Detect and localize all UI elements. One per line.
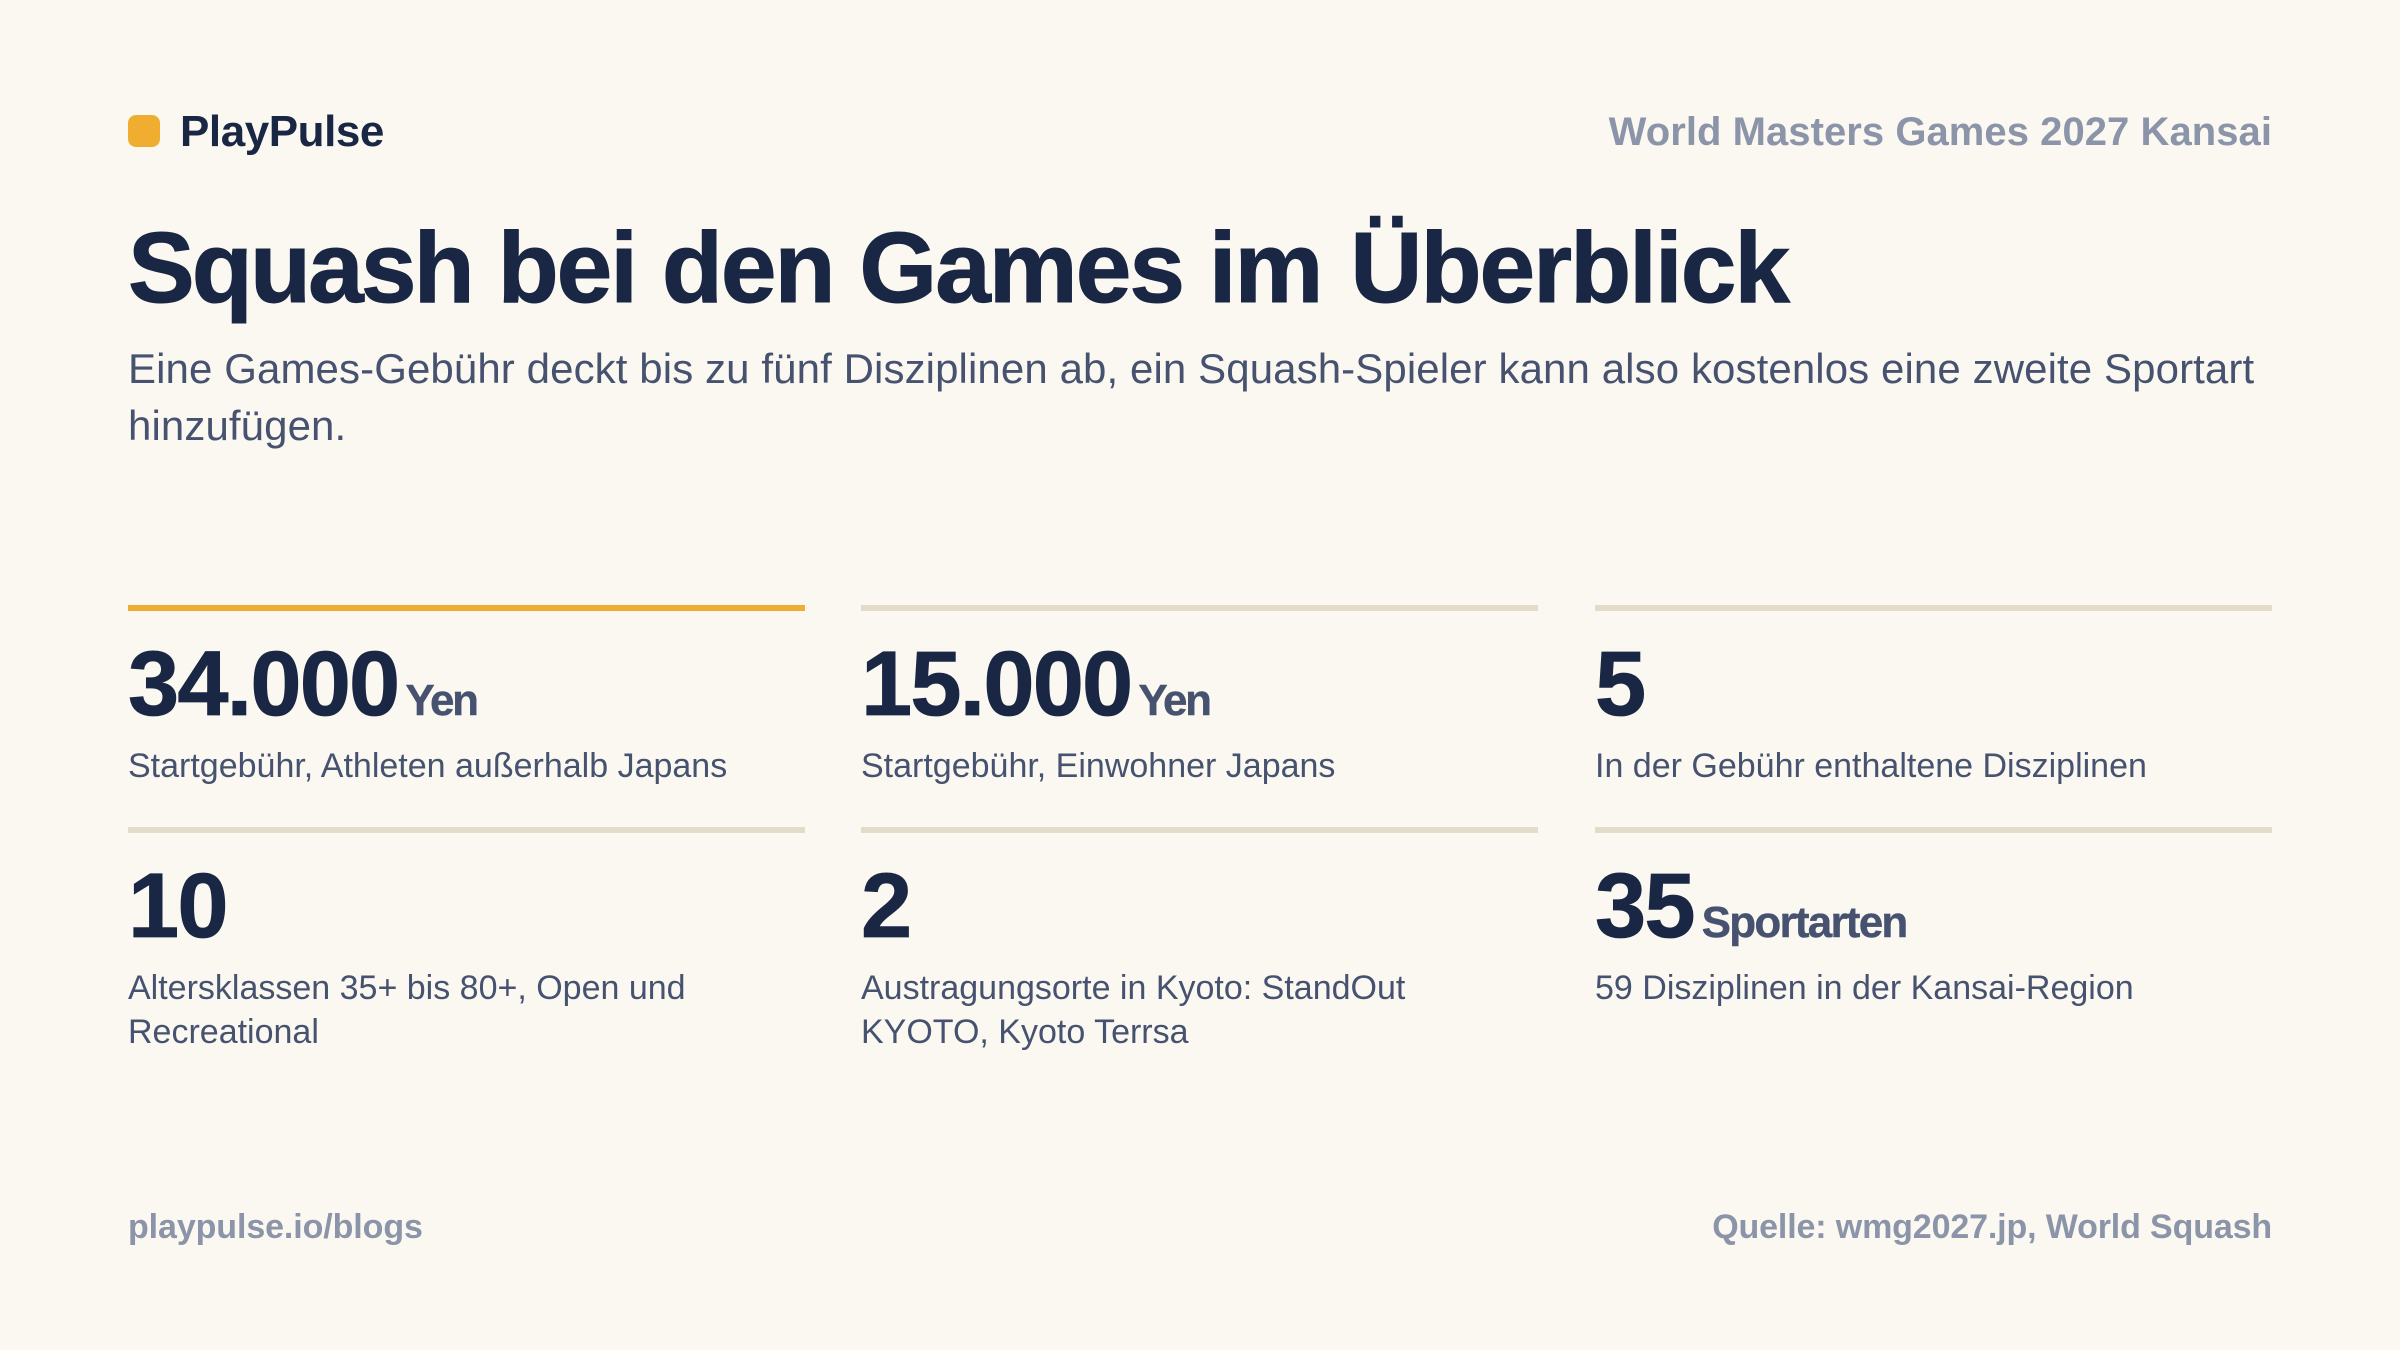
label: In der Gebühr enthaltene Disziplinen — [1595, 747, 2147, 785]
value: 5 — [1595, 633, 1644, 735]
footer link: playpulse.io/blogs — [128, 1208, 423, 1246]
label: Altersklassen 35+ bis 80+, Open und — [128, 969, 686, 1007]
subtitle: Eine Games-Gebühr deckt bis zu fünf Disziplinen ab, ein Squash-Spieler kann also kostenlos eine zweite Sportart — [128, 345, 2254, 392]
brand name: PlayPulse — [180, 107, 384, 156]
icon: brand square — [128, 115, 160, 147]
label: Startgebühr, Einwohner Japans — [861, 747, 1335, 785]
stat: Sportarten — [1595, 827, 2272, 1007]
label: KYOTO, Kyoto Terrsa — [861, 1013, 1189, 1051]
footer source: Quelle: wmg2027.jp, World Squash — [1712, 1208, 2272, 1246]
value: 35Sportarten — [1595, 855, 1907, 957]
brand logo — [128, 107, 384, 156]
stat: Startgebühr Japan — [861, 605, 1538, 785]
subtitle: hinzufügen. — [128, 402, 346, 449]
title: Squash bei den Games im Überblick — [128, 212, 1788, 324]
label: Austragungsorte in Kyoto: StandOut — [861, 969, 1405, 1007]
stat: Altersklassen — [128, 827, 805, 1051]
subtitle — [128, 345, 2254, 449]
value: 10 — [128, 855, 227, 957]
label — [861, 969, 1406, 1051]
value: 2 — [861, 855, 910, 957]
label: Startgebühr, Athleten außerhalb Japans — [128, 747, 727, 785]
value: 15.000Yen — [861, 633, 1210, 735]
label — [128, 969, 686, 1051]
label: Recreational — [128, 1013, 319, 1051]
value: 34.000Yen — [128, 633, 477, 735]
stat: Startgebühr Ausland — [128, 605, 805, 785]
event name: World Masters Games 2027 Kansai — [1609, 110, 2272, 154]
stat: Disziplinen — [1595, 605, 2272, 785]
label: 59 Disziplinen in der Kansai-Region — [1595, 969, 2134, 1007]
stat: Austragungsorte — [861, 827, 1538, 1051]
